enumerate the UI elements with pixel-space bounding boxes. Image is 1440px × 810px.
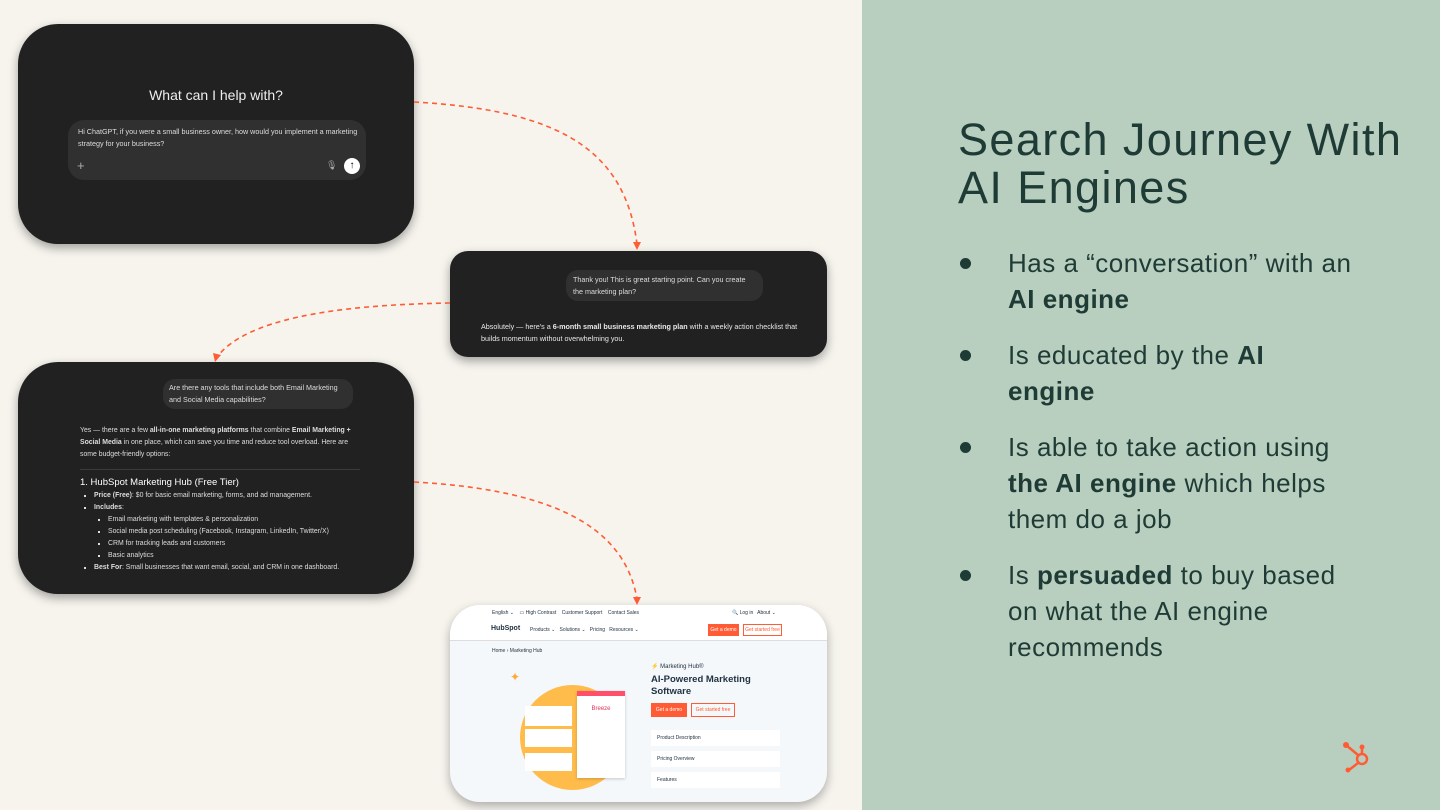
user bubble: Are there any tools that include both Email Marketing and Social Media capabilities? [169, 383, 338, 404]
panel: hubspot page: Get started free [696, 707, 730, 713]
panel: hubspot page: Get started free [745, 627, 780, 633]
response text: Absolutely — here's a 6-month small business marketing plan with a weekly action checklist that builds momentum without overwhelming you. [481, 322, 797, 343]
response: Best For: Small businesses that want email, social, and CRM in one dashboard. [94, 564, 339, 571]
icon: hubspot sprocket [1343, 742, 1368, 772]
heading: what can I help with: What can I help with? [149, 87, 283, 103]
response: Yes — there are a few all-in-one marketing platforms that combine Email Marketing + Social Media in one place, which can save you time and reduce tool overload. Here are some budget-friendly options: [80, 427, 351, 458]
response: Email marketing with templates & personalization [108, 516, 258, 523]
panel: hubspot page: 🔍 Log in About ⌄ [732, 610, 776, 616]
panel: hubspot page: ✦ [510, 670, 520, 684]
panel: right text: them do a job [1008, 504, 1172, 534]
response: CRM for tracking leads and customers [108, 540, 225, 547]
logo: hubspot: HubSpot [491, 625, 520, 632]
panel: right text: on what the AI engine [1008, 596, 1269, 626]
panel: right text: the AI engine which helps [1008, 468, 1326, 498]
response [80, 426, 360, 571]
panel: hubspot page: Features [657, 777, 677, 783]
panel: hubspot page: Get a demo [656, 707, 682, 713]
panel: hubspot page: Product Description [657, 735, 701, 741]
title: AI Engines [958, 162, 1190, 213]
panel: right text: engine [1008, 376, 1095, 406]
panel: right text: recommends [1008, 632, 1163, 662]
panel: hubspot page [450, 605, 827, 802]
title: Search Journey With [958, 114, 1402, 165]
response: Price (Free): $0 for basic email marketing, forms, and ad management. [94, 492, 312, 499]
arrows: dashed connectors [213, 101, 641, 605]
page heading: Software [651, 686, 691, 697]
page heading [651, 674, 751, 697]
panel: hubspot page: Get a demo [710, 627, 737, 633]
input box: + [77, 158, 85, 173]
response: 1. HubSpot Marketing Hub (Free Tier) [80, 477, 239, 488]
panel: hubspot page: English ⌄ ▭ High Contrast Customer Support Contact Sales [492, 610, 639, 616]
input box: ↑ [350, 160, 354, 171]
panel: hubspot page: Home › Marketing Hub [492, 648, 542, 654]
bullet list [960, 248, 1351, 662]
user bubble [566, 270, 763, 301]
response: Basic analytics [108, 552, 154, 559]
response: Includes: [94, 504, 124, 511]
input box: 🎙 [326, 160, 337, 170]
panel: right text: AI engine [1008, 284, 1130, 314]
panel: right text [862, 0, 1440, 810]
title [958, 114, 1402, 213]
panel: tools answer [18, 362, 414, 594]
illustration [520, 685, 625, 790]
user bubble [163, 379, 353, 409]
panel: hubspot page: Pricing Overview [657, 756, 695, 762]
panel: right text: Is educated by the AI [1008, 340, 1264, 370]
panel: chatgpt prompt [18, 24, 414, 244]
response: Social media post scheduling (Facebook, Instagram, LinkedIn, Twitter/X) [108, 528, 329, 535]
input box [68, 120, 366, 180]
panel: hubspot page: Products ⌄ Solutions ⌄ Pricing Resources ⌄ [530, 627, 639, 633]
panel: right text: Has a “conversation” with an [1008, 248, 1351, 278]
panel: right text: Is able to take action using [1008, 432, 1330, 462]
user bubble: Thank you! This is great starting point. Can you create the marketing plan? [573, 275, 745, 296]
page heading: AI-Powered Marketing [651, 674, 751, 685]
panel: hubspot page: Breeze [591, 706, 610, 712]
panel: right text: Is persuaded to buy based [1008, 560, 1336, 590]
panel: hubspot page: ⚡ Marketing Hub® [651, 664, 704, 670]
panel: chat follow-up [450, 251, 827, 357]
input box: Hi ChatGPT, if you were a small business owner, how would you implement a marketing strategy for your business? [78, 127, 357, 148]
